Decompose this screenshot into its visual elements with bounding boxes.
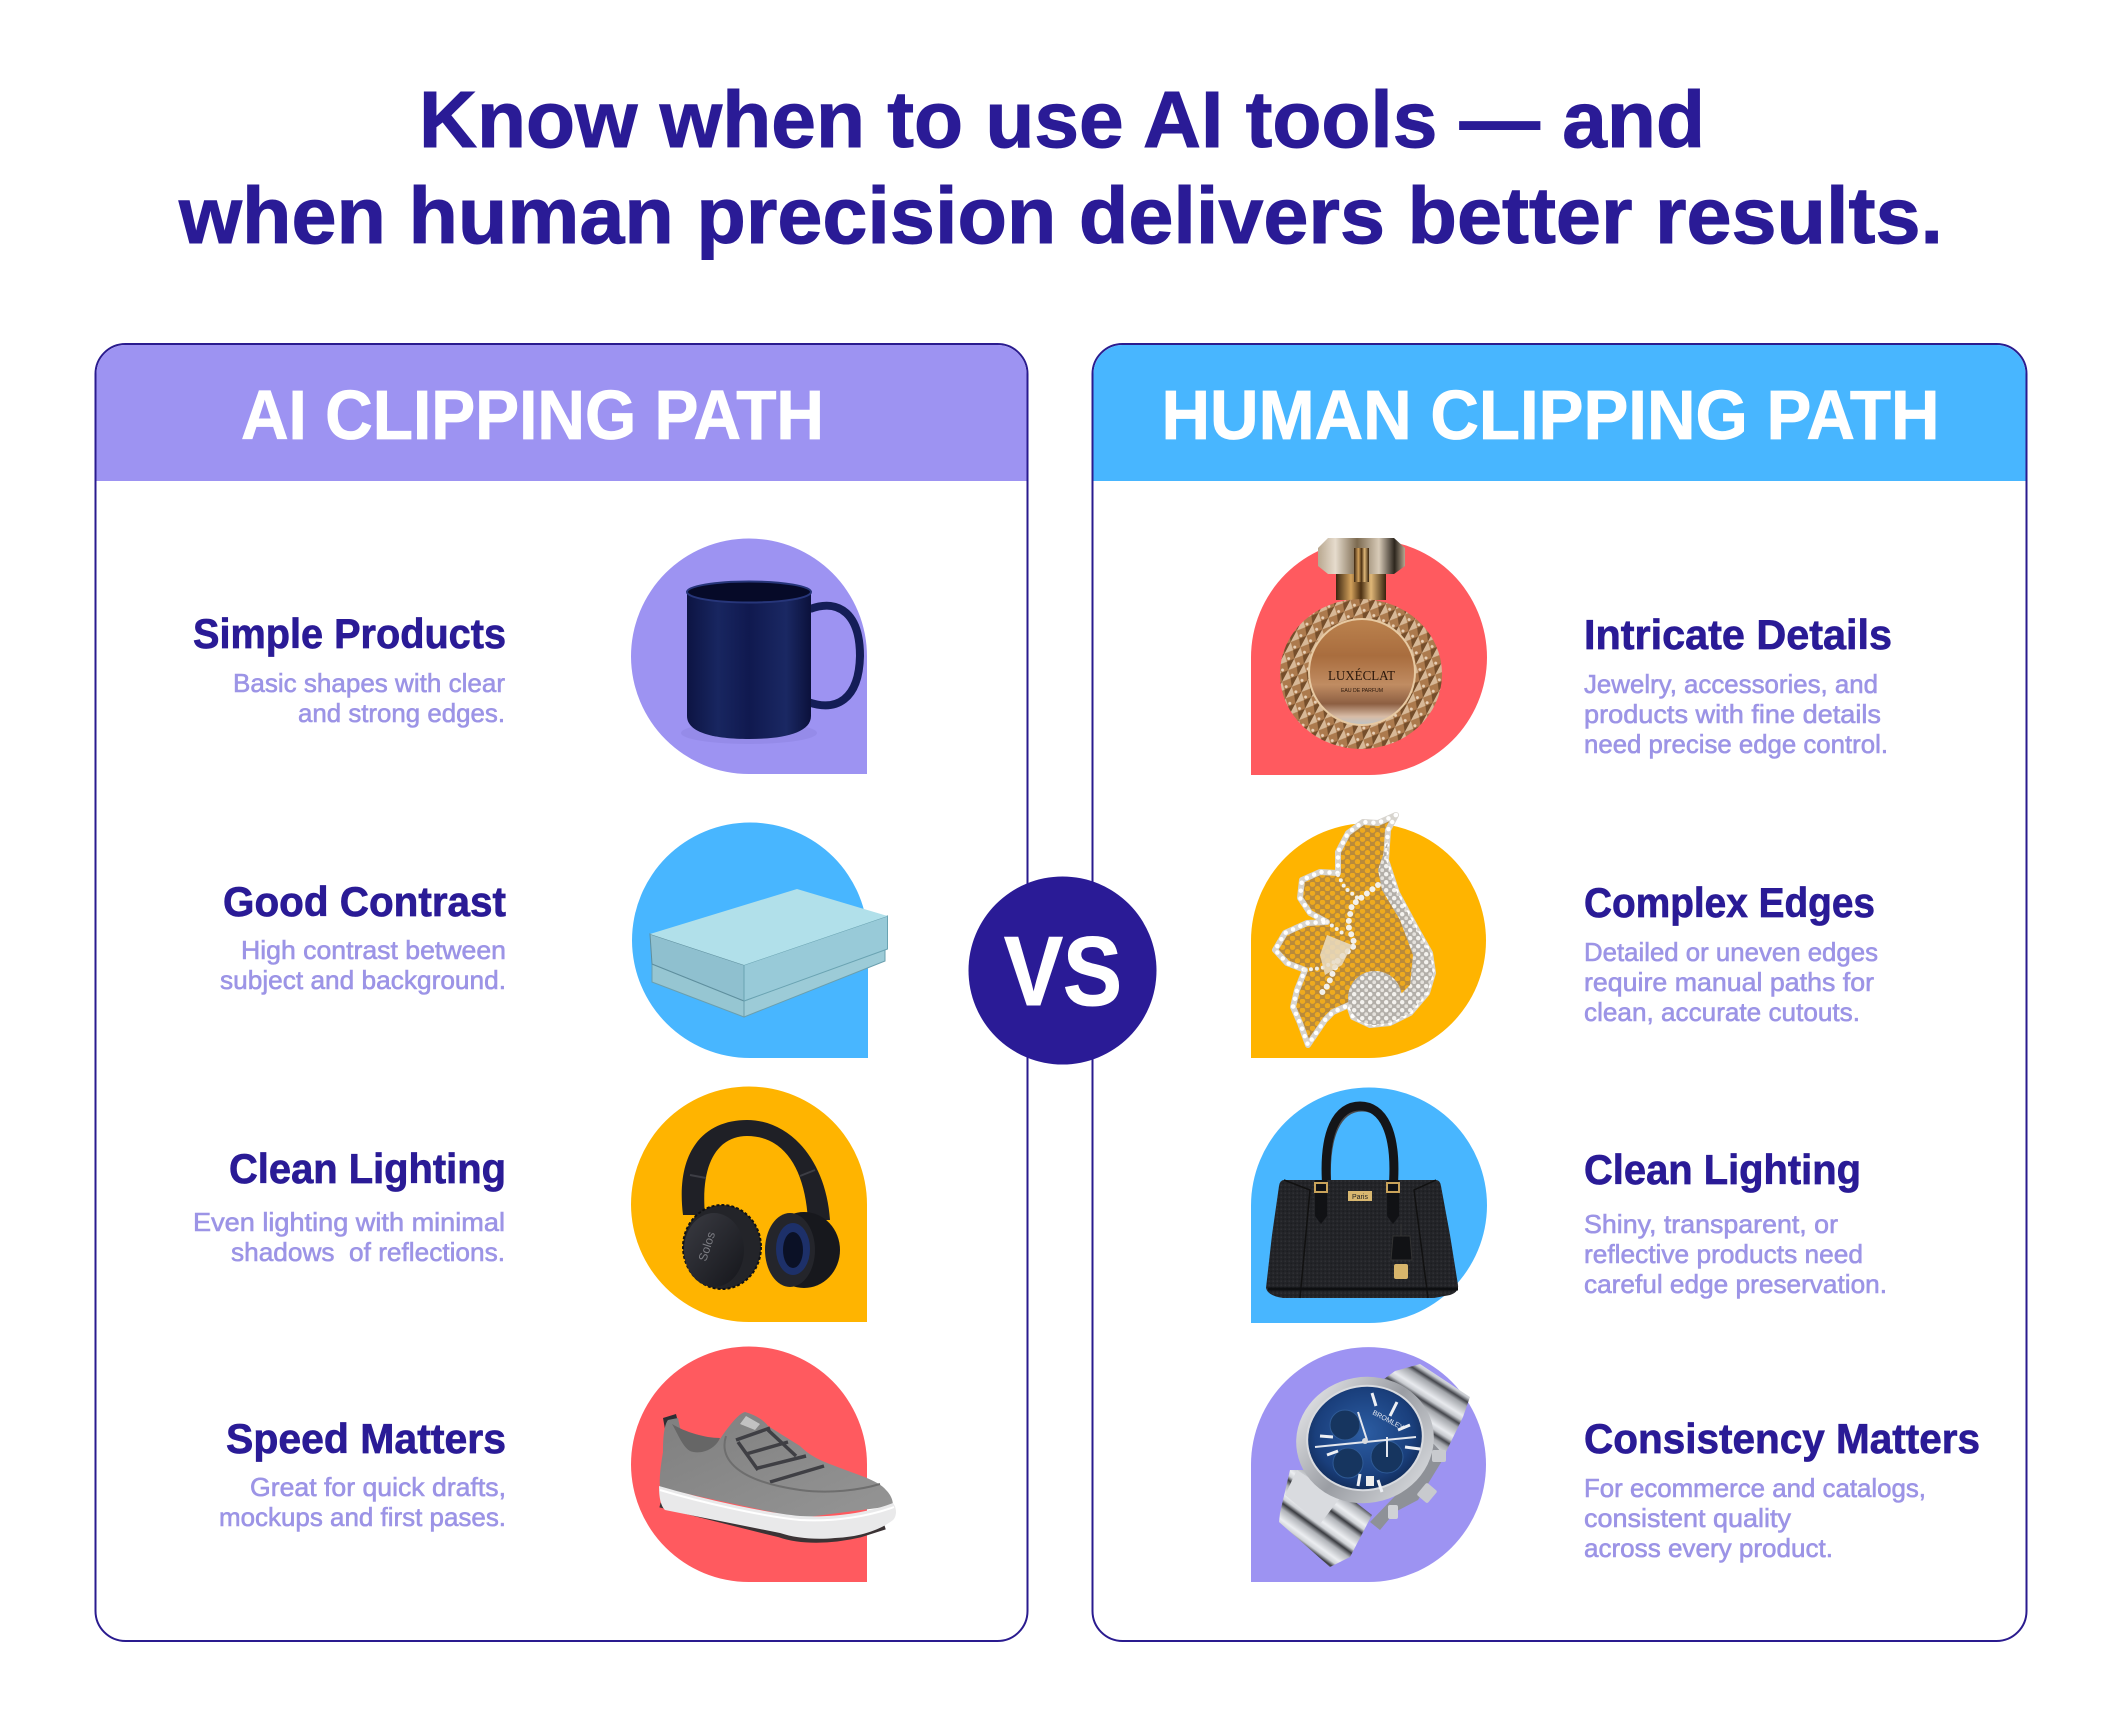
item: Speed Matters: Speed Matters (226, 1415, 506, 1462)
item: Clean Lighting: Clean Lighting (1584, 1146, 1861, 1193)
item: Clean Lighting: Clean Lighting (229, 1145, 506, 1192)
icon: black handbag on blue blob: Paris (1352, 1194, 1368, 1201)
panel: Human clipping path (1092, 344, 2026, 1641)
item: Complex Edges (1584, 879, 1878, 1027)
panel header: Human clipping path (1094, 345, 2026, 481)
panel header: AI clipping path (96, 345, 1026, 481)
icon: wristwatch on lavender blob (1251, 1347, 1486, 1582)
icon: sneaker on coral blob (631, 1346, 896, 1582)
item: Clean Lighting (193, 1145, 506, 1267)
item: Consistency Matters (1584, 1415, 1980, 1563)
item: Consistency Matters: consistent quality (1584, 1503, 1791, 1533)
item: Consistency Matters: across every product. (1584, 1533, 1833, 1563)
item: Good Contrast (220, 878, 506, 995)
item: Clean Lighting (1584, 1146, 1887, 1299)
item: Good Contrast: subject and background. (220, 965, 506, 995)
item: Intricate Details (1584, 611, 1892, 759)
item: Clean Lighting: careful edge preservation. (1584, 1269, 1887, 1299)
item: Speed Matters: Great for quick drafts, (250, 1472, 506, 1502)
item: Intricate Details: need precise edge control. (1584, 729, 1888, 759)
item: Intricate Details: Intricate Details (1584, 611, 1892, 658)
item: Good Contrast: High contrast between (241, 935, 506, 965)
item: Clean Lighting: reflective products need (1584, 1239, 1863, 1269)
panel header: Human clipping path: HUMAN CLIPPING PATH (1162, 376, 1940, 454)
item: Clean Lighting: Even lighting with minimal (193, 1207, 505, 1237)
item: Speed Matters (219, 1415, 506, 1532)
item: Good Contrast: Good Contrast (223, 878, 506, 925)
icon: jewelled brooch on yellow blob (1251, 815, 1486, 1058)
item: Consistency Matters: For ecommerce and catalogs, (1584, 1473, 1926, 1503)
icon: black handbag on blue blob (1251, 1088, 1487, 1323)
icon: perfume bottle on coral blob: LUXÉCLAT (1328, 668, 1396, 683)
item: Simple Products: Simple Products (193, 610, 506, 657)
icon: mug on lavender blob (631, 538, 867, 774)
item: Simple Products: Basic shapes with clear (233, 668, 505, 698)
icon: headphones on yellow blob (631, 1086, 867, 1322)
icon: perfume bottle on coral blob: EAU DE PARFUM (1341, 688, 1383, 694)
item: Speed Matters: mockups and first pases. (219, 1502, 506, 1532)
item: Clean Lighting: shadows of reflections. (231, 1237, 505, 1267)
item: Intricate Details: Jewelry, accessories, and (1584, 669, 1878, 699)
item: Complex Edges: Detailed or uneven edges (1584, 937, 1878, 967)
item: Simple Products (193, 610, 506, 728)
item: Complex Edges: require manual paths for (1584, 967, 1874, 997)
badge: VS: VS (1004, 916, 1122, 1026)
icon: headphones on yellow blob: Solos (696, 1230, 718, 1263)
badge: VS (968, 876, 1156, 1064)
item: Simple Products: and strong edges. (298, 698, 505, 728)
title: when human precision delivers better results. (178, 171, 1943, 260)
item: Complex Edges: clean, accurate cutouts. (1584, 997, 1860, 1027)
item: Complex Edges: Complex Edges (1584, 879, 1875, 926)
item: Consistency Matters: Consistency Matters (1584, 1415, 1980, 1462)
item: Intricate Details: products with fine details (1584, 699, 1881, 729)
icon: wristwatch on lavender blob: BROMLEY (1371, 1410, 1405, 1432)
icon: perfume bottle on coral blob (1251, 538, 1487, 775)
panel: AI clipping path (96, 344, 1028, 1641)
icon: box on blue blob (632, 822, 888, 1058)
panel header: AI clipping path: AI CLIPPING PATH (241, 376, 824, 454)
title: Know when to use AI tools — and (419, 75, 1705, 164)
item: Clean Lighting: Shiny, transparent, or (1584, 1209, 1838, 1239)
title (178, 75, 1943, 260)
